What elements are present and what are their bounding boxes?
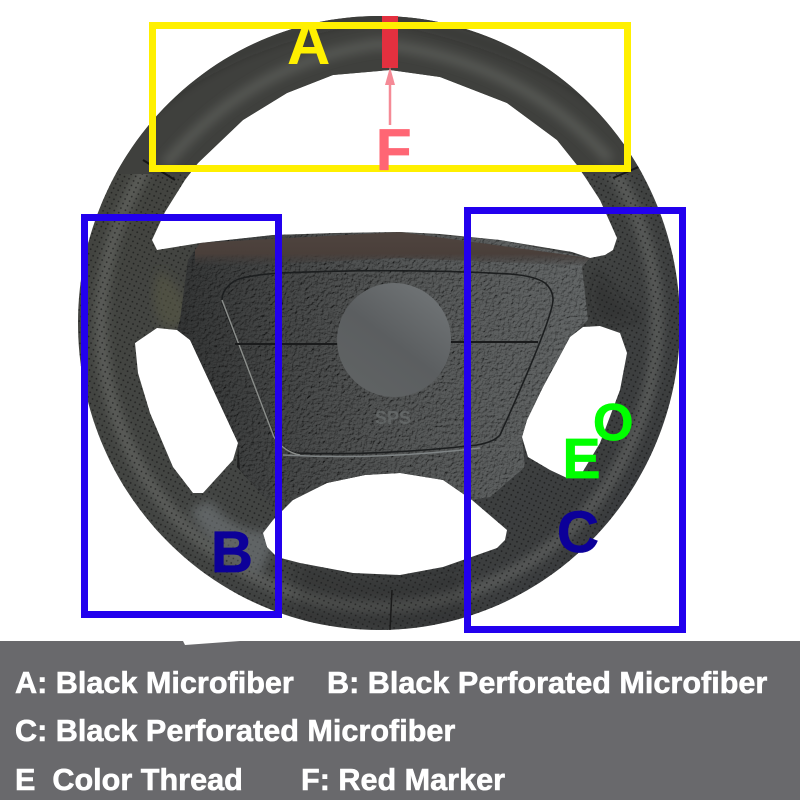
box A: yellow frame xyxy=(152,26,628,168)
label O: O xyxy=(593,394,633,452)
steering wheel photo illustration xyxy=(70,10,690,642)
legend text: A and B xyxy=(15,666,767,700)
airbag pad outline xyxy=(222,271,553,454)
centre grey disc xyxy=(337,283,451,397)
legend text: A and B: B: Black Perforated Microfiber xyxy=(327,666,767,700)
legend text: C: C: Black Perforated Microfiber xyxy=(15,714,455,748)
wheel rim xyxy=(70,10,690,640)
arrow to red marker xyxy=(385,67,395,125)
label F: F xyxy=(376,118,411,183)
SPS airbag embossed mark: SPS xyxy=(375,408,411,428)
box C: blue frame xyxy=(468,210,682,630)
legend text: E and F: E Color Thread xyxy=(15,763,243,797)
box B: blue frame xyxy=(84,218,278,614)
legend text: A and B: A: Black Microfiber xyxy=(15,666,294,700)
label B: B xyxy=(211,520,253,585)
legend panel xyxy=(0,641,800,800)
legend text: E and F xyxy=(15,763,505,797)
label E: E xyxy=(562,427,601,491)
label A: A xyxy=(287,10,330,77)
label C: C xyxy=(557,500,599,565)
airbag hub xyxy=(170,225,600,515)
red marker xyxy=(382,16,398,68)
legend text: E and F: F: Red Marker xyxy=(301,763,505,797)
